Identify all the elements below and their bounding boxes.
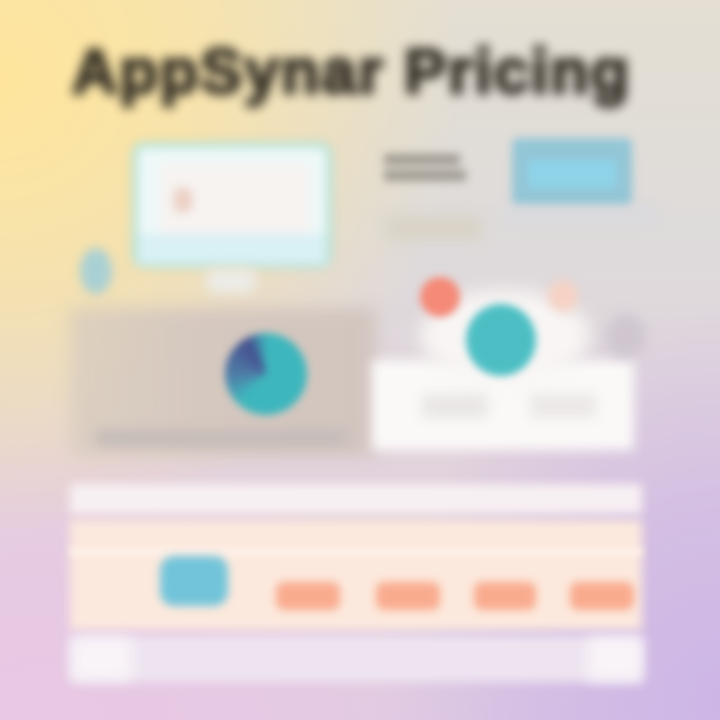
- table footer: [70, 636, 642, 682]
- icon: top right blue screen: [506, 132, 638, 209]
- text block: top middle label: [379, 148, 470, 186]
- table body peach: [70, 520, 642, 630]
- footer left highlight: [72, 638, 132, 680]
- screen frame: [512, 138, 632, 206]
- button: coral plan 2: [376, 582, 440, 610]
- panel: middle left beige: [70, 308, 376, 456]
- card inner content: [160, 164, 310, 234]
- text: white panel left label: [422, 394, 488, 418]
- panel: top-left screen card: [126, 136, 337, 274]
- text block: faint middle caption: [386, 216, 482, 240]
- table: pricing: [64, 480, 650, 688]
- table row stripe: [70, 548, 642, 556]
- table header: [70, 484, 642, 514]
- text: beige panel footer: [96, 430, 346, 446]
- icon: small teal circle left: [80, 248, 112, 294]
- footer right highlight: [588, 638, 642, 680]
- label line two: [384, 170, 466, 181]
- icon: teal circle: [466, 304, 536, 376]
- icon: pale coral circle: [548, 280, 578, 312]
- button: coral plan 1: [276, 582, 340, 610]
- text: white panel right label: [530, 394, 596, 418]
- card frame: [132, 142, 332, 268]
- button: blue plan: [160, 556, 228, 606]
- card lower glow: [138, 234, 326, 264]
- icon: coral circle: [420, 277, 460, 317]
- panel top bump: [420, 290, 590, 382]
- title: AppSynar Pricing: [72, 37, 631, 107]
- button: coral plan 3: [474, 582, 536, 610]
- faint stand under screen: [506, 208, 656, 222]
- card small accent: [174, 188, 192, 212]
- label line one: [384, 154, 460, 165]
- icon: grey right circle: [606, 314, 646, 358]
- button: coral plan 4: [570, 582, 634, 610]
- chart: teal pie: [225, 333, 307, 415]
- card pointer tail: [206, 268, 256, 294]
- screen highlight: [528, 160, 616, 188]
- panel: middle right white: [372, 360, 634, 450]
